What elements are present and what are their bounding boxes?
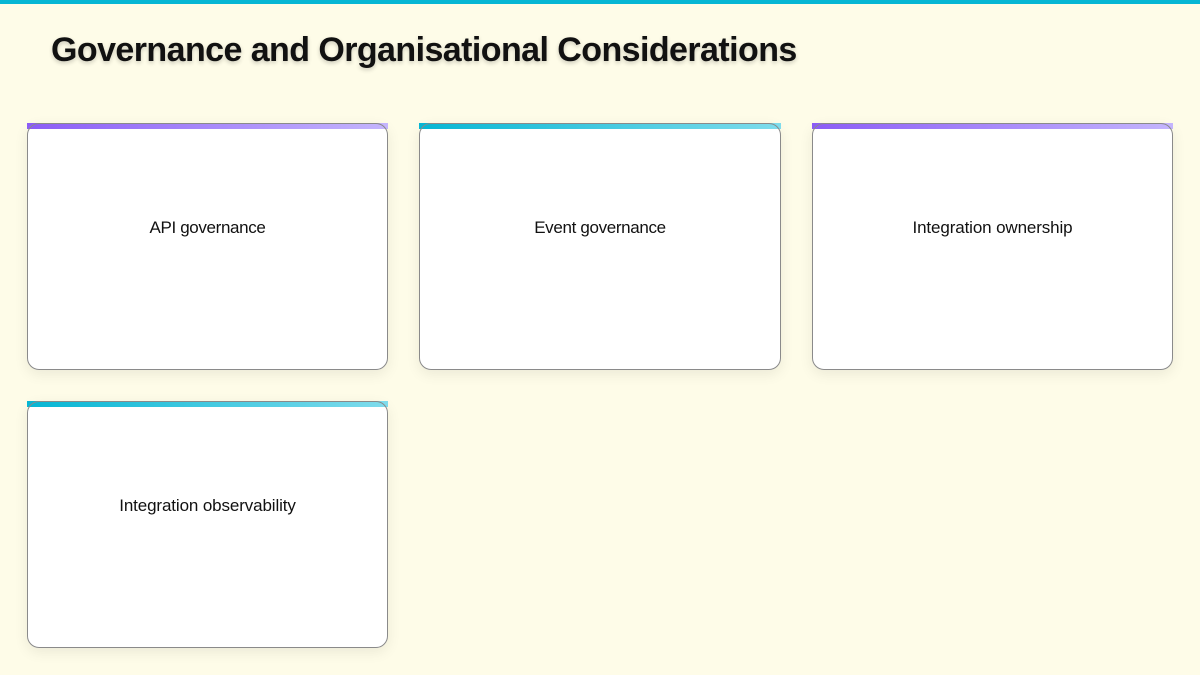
card outline [27,123,388,370]
accent bar: cyan [419,123,781,129]
panel: Integration ownership [812,123,1173,370]
card label: Event governance: Event governance [534,218,666,237]
card label: API governance: API governance [150,218,265,237]
title: Governance and Organisational Considerations [51,31,797,69]
card label: Integration ownership: Integration ownership [912,218,1073,237]
accent bar: cyan [27,401,388,407]
panel: Event governance [419,123,781,370]
accent bar: purple [27,123,388,129]
card label: Integration observability: Integration observability [119,496,296,515]
panel: API governance [27,123,388,370]
card outline [419,123,781,370]
top accent bar [0,0,1200,4]
accent bar: purple [812,123,1173,129]
card outline [812,123,1173,370]
card outline [27,401,388,648]
panel: Integration observability [27,401,388,648]
